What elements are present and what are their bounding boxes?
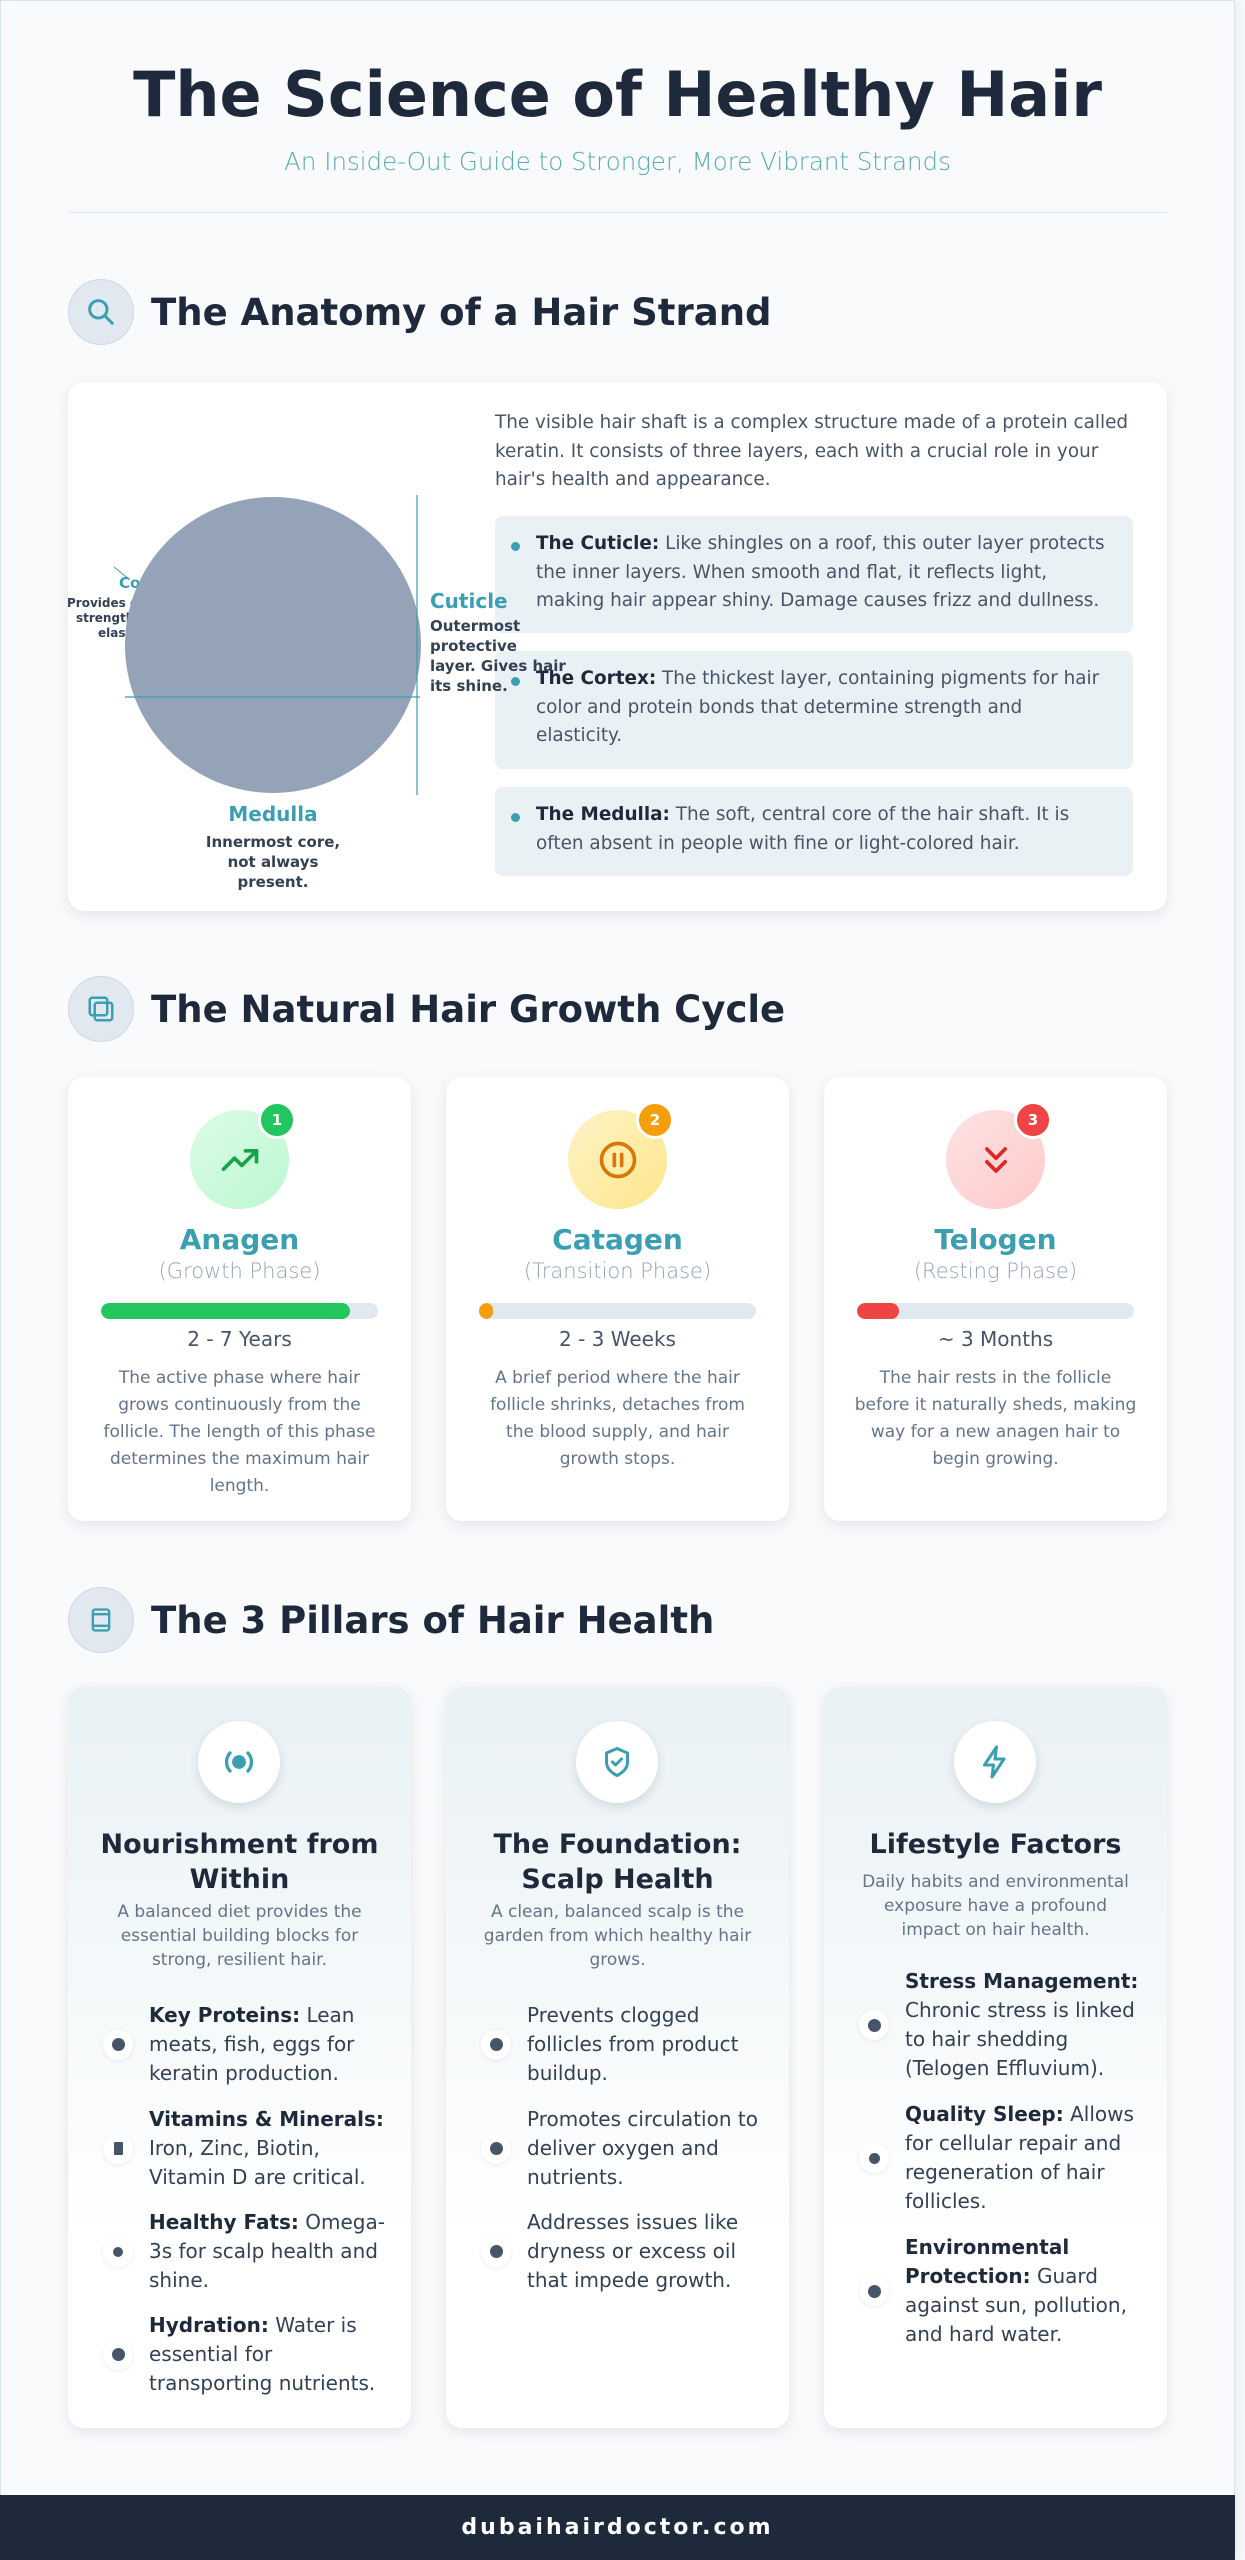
label: cuticle: its shine. xyxy=(430,677,508,695)
card: anagen: The active phase where hair grows continuously from the follicle. The length of this phase determines the maximum hair length. xyxy=(103,1368,376,1496)
diagram: hair cross-section xyxy=(67,495,421,891)
icon: layers xyxy=(68,976,134,1042)
diagram: hair cross-section: Medulla xyxy=(228,802,318,826)
icon: shield xyxy=(576,1721,658,1803)
diagram: hair cross-section: present. xyxy=(238,873,308,891)
icon: pause xyxy=(568,1110,667,1209)
pillar: lifestyle: Quality Sleep: Allows for cellular repair and regeneration of hair follicles. xyxy=(905,2102,1134,2213)
diagram: hair cross-section: strength, and xyxy=(76,611,168,625)
pillar: scalp xyxy=(446,1687,789,2428)
pillar: scalp: Prevents clogged follicles from product buildup. xyxy=(527,2003,738,2085)
pillar: lifestyle xyxy=(824,1687,1167,2428)
label: cuticle: Cuticle xyxy=(430,589,508,613)
icon: tablet xyxy=(68,1587,134,1653)
section heading: anatomy xyxy=(68,279,772,345)
bullet: cuticle: The Cuticle: Like shingles on a roof, this outer layer protects the inner layers. When smooth and flat, it reflects light, making hair appear shiny. Damage causes frizz and dullness. xyxy=(536,533,1105,611)
card: anagen: 2 - 7 Years xyxy=(187,1327,292,1351)
card: catagen: (Transition Phase) xyxy=(524,1259,711,1283)
subtitle: An Inside-Out Guide to Stronger, More Vibrant Strands xyxy=(284,147,951,176)
pillar: nourishment: A balanced diet provides the essential building blocks for strong, resilient hair. xyxy=(117,1902,362,1970)
card: anagen: (Growth Phase) xyxy=(159,1259,320,1283)
icon: nutrient xyxy=(198,1721,280,1803)
pillar: nourishment: Hydration: Water is essential for transporting nutrients. xyxy=(149,2313,375,2395)
section heading: pillars xyxy=(68,1587,714,1653)
label: cuticle: Outermost xyxy=(430,617,520,635)
intro text: The visible hair shaft is a complex structure made of a protein called keratin. It consists of three layers, each with a crucial role in your hair's health and appearance. xyxy=(495,412,1128,490)
pillar: lifestyle: Lifestyle Factors xyxy=(870,1829,1122,1860)
bullet: medulla xyxy=(495,787,1133,876)
diagram: hair cross-section: Cortex xyxy=(119,574,175,592)
card: telogen: 3 xyxy=(1028,1111,1038,1129)
card: catagen xyxy=(446,1077,789,1521)
section heading: pillars: The 3 Pillars of Hair Health xyxy=(151,1598,714,1642)
bullet: cortex xyxy=(495,651,1133,769)
bullet: medulla: The Medulla: The soft, central core of the hair shaft. It is often absent in people with fine or light-colored hair. xyxy=(536,804,1069,854)
card: catagen: Catagen xyxy=(552,1223,683,1256)
card: anagen: Anagen xyxy=(180,1223,299,1256)
icon: lightning xyxy=(954,1721,1036,1803)
bullet: cortex: The Cortex: The thickest layer, containing pigments for hair color and protein bonds that determine strength and elasticity. xyxy=(536,668,1099,746)
card: anagen: 1 xyxy=(272,1111,282,1129)
pillar: lifestyle: Environmental Protection: Guard against sun, pollution, and hard water. xyxy=(905,2235,1127,2346)
pillar: scalp: Addresses issues like dryness or excess oil that impede growth. xyxy=(527,2210,738,2292)
card: catagen: 2 xyxy=(650,1111,660,1129)
icon: trending up xyxy=(190,1110,289,1209)
diagram: hair cross-section: not always xyxy=(228,853,318,871)
label: cuticle xyxy=(430,589,566,695)
bullet: cuticle xyxy=(495,516,1133,633)
pillar: lifestyle: Stress Management: Chronic stress is linked to hair shedding (Telogen Effluvium). xyxy=(905,1969,1138,2080)
card: telogen: (Resting Phase) xyxy=(914,1259,1077,1283)
pillar: scalp: A clean, balanced scalp is the garden from which healthy hair grows. xyxy=(484,1902,751,1970)
icon: magnifier xyxy=(68,279,134,345)
pillar: lifestyle: Daily habits and environmental exposure have a profound impact on hair health. xyxy=(862,1872,1129,1940)
section heading: growth cycle xyxy=(68,976,785,1042)
panel: anatomy xyxy=(68,382,1167,911)
card: catagen: A brief period where the hair follicle shrinks, detaches from the blood supply, and hair growth stops. xyxy=(490,1368,745,1469)
pillar: nourishment: Key Proteins: Lean meats, fish, eggs for keratin production. xyxy=(149,2003,354,2085)
pillar: nourishment: Healthy Fats: Omega-3s for scalp health and shine. xyxy=(149,2210,385,2292)
section heading: anatomy: The Anatomy of a Hair Strand xyxy=(151,290,772,334)
pillar: scalp: The Foundation: Scalp Health xyxy=(494,1829,741,1895)
pillar: nourishment: Vitamins & Minerals: Iron, Zinc, Biotin, Vitamin D are critical. xyxy=(149,2107,384,2189)
card: telogen xyxy=(824,1077,1167,1521)
diagram: hair cross-section: elasticity. xyxy=(98,626,164,640)
footer: dubaihairdoctor.com xyxy=(461,2515,774,2540)
icon: chevrons down xyxy=(946,1110,1045,1209)
label: cuticle: layer. Gives hair xyxy=(430,657,566,675)
pillar: nourishment xyxy=(68,1687,411,2428)
card: telogen: The hair rests in the follicle before it naturally sheds, making way for a new anagen hair to begin growing. xyxy=(855,1368,1136,1469)
card: telogen: ~ 3 Months xyxy=(938,1327,1053,1351)
pillar: nourishment: Nourishment from Within xyxy=(101,1829,378,1895)
title: The Science of Healthy Hair xyxy=(133,58,1102,131)
diagram: hair cross-section: Innermost core, xyxy=(206,833,340,851)
card: anagen xyxy=(68,1077,411,1521)
card: telogen: Telogen xyxy=(934,1223,1057,1256)
footer xyxy=(0,2495,1235,2560)
label: cuticle: protective xyxy=(430,637,517,655)
section heading: growth cycle: The Natural Hair Growth Cycle xyxy=(151,988,785,1030)
card: catagen: 2 - 3 Weeks xyxy=(559,1327,676,1351)
diagram: hair cross-section: Provides color, xyxy=(67,596,166,610)
pillar: scalp: Promotes circulation to deliver oxygen and nutrients. xyxy=(527,2107,758,2189)
